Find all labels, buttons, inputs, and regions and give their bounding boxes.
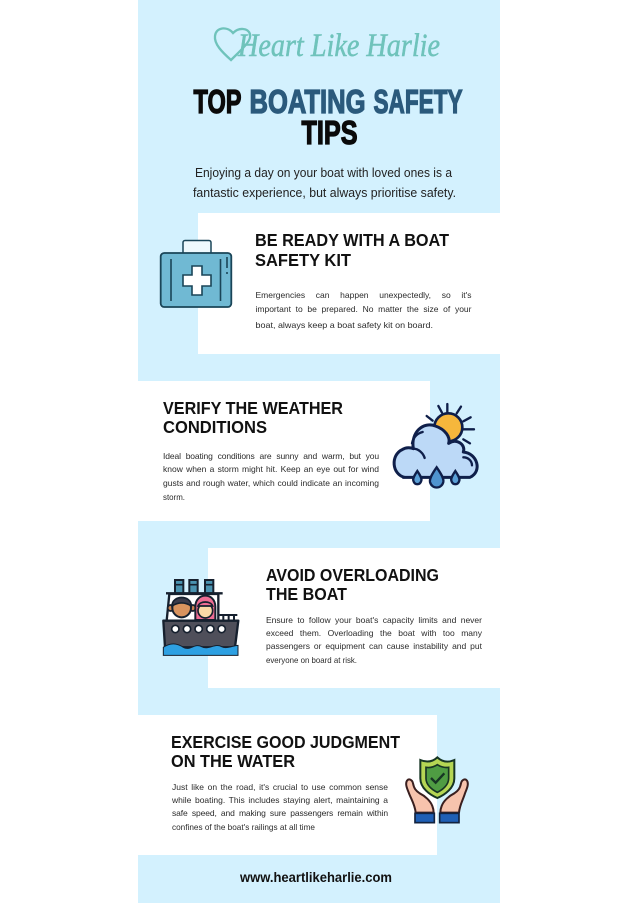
heading: exercise good judgment <box>171 732 400 771</box>
text: weather conditions: storm. <box>163 492 185 502</box>
icon: first aid kit <box>161 240 231 307</box>
footer website: www.heartlikeharlie.com <box>239 869 392 885</box>
title <box>194 83 462 151</box>
text: boat safety kit: boat, always keep a boat safety kit on board. <box>256 320 433 330</box>
title: SAFETY <box>374 83 462 120</box>
logo: Heart Like Harlie: Heart Like Harlie <box>237 28 440 64</box>
icon: boat with passengers <box>163 580 238 655</box>
heading: avoid overloading: AVOID OVERLOADING <box>266 565 439 585</box>
title: BOATING <box>250 83 366 120</box>
intro text <box>193 165 456 200</box>
heading: weather conditions: CONDITIONS <box>163 417 267 437</box>
heading: weather conditions: VERIFY THE WEATHER <box>163 398 343 418</box>
panel: boat safety kit <box>161 213 500 354</box>
text: avoid overloading <box>266 616 482 665</box>
intro text: Enjoying a day on your boat with loved ones is a <box>195 165 453 180</box>
title: TOP <box>194 83 242 120</box>
icon: sun and rain cloud <box>394 404 477 487</box>
text: avoid overloading: everyone on board at risk. <box>266 655 357 665</box>
heading: boat safety kit: SAFETY KIT <box>255 250 351 270</box>
text: exercise good judgment <box>172 783 388 832</box>
heading: boat safety kit: BE READY WITH A BOAT <box>255 230 449 250</box>
intro text: fantastic experience, but always prioritise safety. <box>193 185 456 200</box>
panel: weather conditions <box>138 381 430 521</box>
icon: hands holding shield <box>406 757 468 823</box>
heading: weather conditions <box>163 398 343 437</box>
text: boat safety kit <box>256 291 472 330</box>
heading: avoid overloading: THE BOAT <box>266 584 347 604</box>
heading: boat safety kit <box>255 230 449 270</box>
heading: exercise good judgment: EXERCISE GOOD JUDGMENT <box>171 732 400 752</box>
heading: avoid overloading <box>266 565 439 604</box>
panel: exercise good judgment <box>138 715 437 855</box>
title: TIPS <box>302 114 358 151</box>
background panel <box>138 0 500 903</box>
panel: avoid overloading <box>208 548 500 688</box>
text: exercise good judgment: confines of the boat's railings at all time <box>172 822 315 832</box>
text: weather conditions <box>163 452 379 502</box>
heading: exercise good judgment: ON THE WATER <box>171 751 295 771</box>
